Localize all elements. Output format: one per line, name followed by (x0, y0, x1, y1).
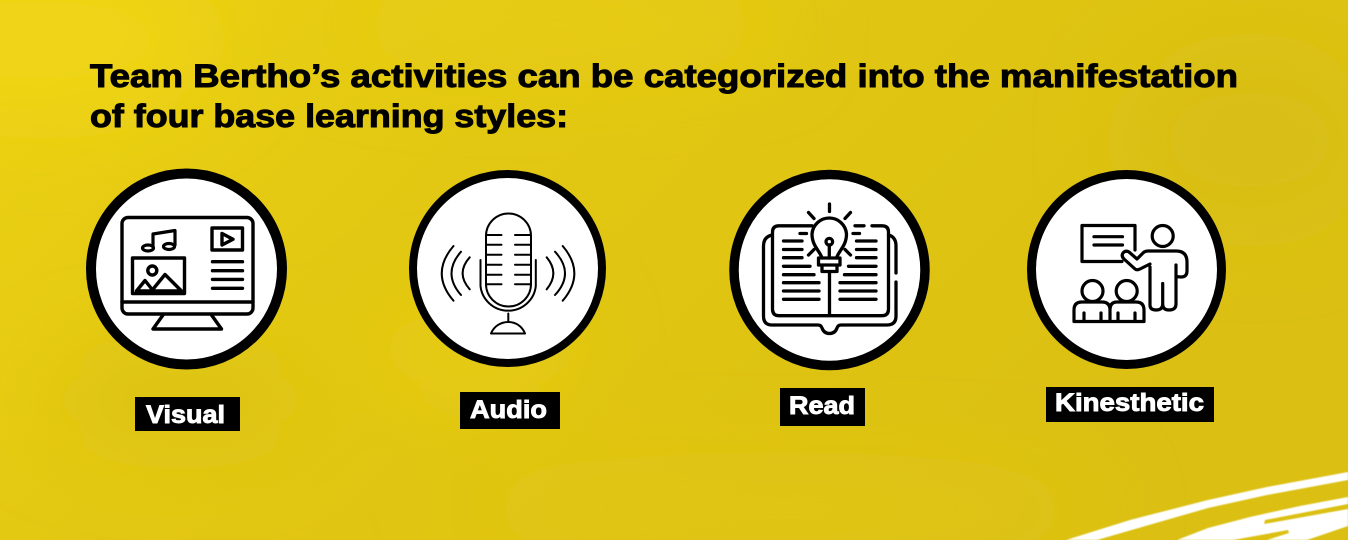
circle badge (91, 174, 282, 364)
circle badge (734, 174, 925, 366)
label: Visual: Visual (146, 401, 225, 429)
title (90, 58, 1238, 134)
icon: open book with light bulb (764, 204, 896, 334)
circle badge (1032, 174, 1222, 364)
icon: microphone with sound waves (442, 214, 574, 334)
label: Kinesthetic: Kinesthetic (1055, 389, 1204, 417)
label: Kinesthetic (1046, 387, 1214, 422)
panel: read (734, 174, 925, 426)
title: of four base learning styles: (90, 98, 568, 134)
panel: visual (91, 174, 282, 431)
panel: audio (413, 174, 602, 429)
label: Audio: Audio (470, 396, 547, 424)
label: Visual (135, 397, 240, 431)
icon: teacher and students (1074, 226, 1187, 322)
panel: kinesthetic (1032, 174, 1222, 422)
circle badge (413, 174, 602, 363)
label: Read (780, 388, 865, 426)
title: Team Bertho’s activities can be categorized into the manifestation (90, 58, 1238, 94)
brush stroke: bottom right corner (1066, 472, 1348, 540)
label: Read: Read (789, 392, 855, 420)
icon: monitor with media (122, 218, 253, 329)
label: Audio (460, 392, 560, 429)
